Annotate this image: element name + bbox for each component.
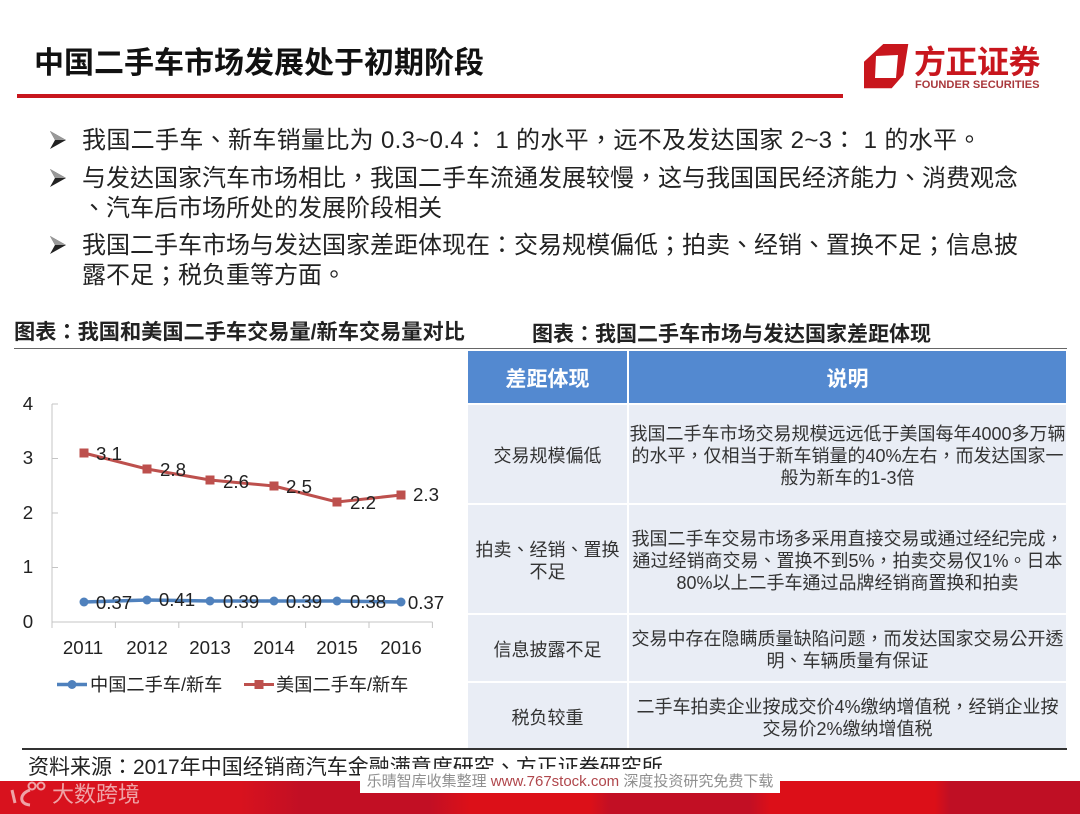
legend: 中国二手车/新车 xyxy=(90,675,222,695)
line chart xyxy=(23,393,444,695)
bullet 2 xyxy=(50,165,1018,222)
series: US xyxy=(80,443,439,513)
bullet 2: 、汽车后市场所处的发展阶段相关 xyxy=(82,195,442,222)
table: 交易价2%缴纳增值税 xyxy=(762,718,932,738)
axes xyxy=(52,404,432,628)
table header: 差距体现 xyxy=(506,368,590,391)
table: 般为新车的1-3倍 xyxy=(780,468,914,488)
table: 说明 xyxy=(826,368,868,391)
bullet 3 xyxy=(50,232,1018,289)
logo: Founder Securities xyxy=(864,44,1040,91)
footer brand watermark xyxy=(10,782,140,807)
x axis labels: 2011 xyxy=(63,637,103,658)
y axis labels: 0 xyxy=(23,611,33,632)
table: 交易中存在隐瞒质量缺陷问题，而发达国家交易公开透 xyxy=(632,629,1064,649)
logo: Founder Securities: 方正证券 xyxy=(914,44,1040,80)
series: China: 0.39 xyxy=(223,591,259,612)
bullet 3: 我国二手车市场与发达国家差距体现在：交易规模偏低；拍卖、经销、置换不足；信息披 xyxy=(82,232,1018,259)
series: China: 0.38 xyxy=(350,591,386,612)
series: China xyxy=(80,589,444,613)
site watermark: 乐晴智库收集整理 www.767stock.com 深度投资研究免费下载 xyxy=(367,773,773,790)
row 1 xyxy=(468,405,627,503)
bullet 1: 我国二手车、新车销量比为 0.3~0.4： 1 的水平，远不及发达国家 2~3： 1 的水平。 xyxy=(82,127,982,154)
table: 我国二手车交易市场多采用直接交易或通过经纪完成， xyxy=(632,529,1064,549)
table: 80%以上二手车通过品牌经销商置换和拍卖 xyxy=(676,573,1019,593)
table: 二手车拍卖企业按成交价4%缴纳增值税，经销企业按 xyxy=(636,697,1058,717)
x axis labels: 2015 xyxy=(316,637,358,658)
y axis labels: 1 xyxy=(23,556,33,577)
table xyxy=(468,351,1066,748)
series: US: 2.3 xyxy=(413,484,439,505)
logo: Founder Securities: FOUNDER SECURITIES xyxy=(915,79,1040,91)
heading rule xyxy=(14,348,1067,349)
bullet list xyxy=(50,127,1018,289)
y axis labels: 4 xyxy=(23,393,33,414)
series: China: 0.41 xyxy=(159,589,195,610)
y axis labels xyxy=(23,393,33,632)
footer band xyxy=(0,781,1080,814)
x axis labels: 2014 xyxy=(253,637,295,658)
row 2: 拍卖、经销、置换 xyxy=(476,540,620,560)
table: 我国二手车市场交易规模远远低于美国每年4000多万辆 xyxy=(629,424,1066,444)
y axis labels: 2 xyxy=(23,502,33,523)
series: China: 0.37 xyxy=(96,592,132,613)
row 2: 不足 xyxy=(530,562,566,582)
y axis labels: 3 xyxy=(23,447,33,468)
row 2 xyxy=(468,505,627,613)
source note: 资料来源：2017年中国经销商汽车金融满意度研究、方正证券研究所 xyxy=(28,756,663,779)
title rule xyxy=(17,94,843,98)
x axis labels: 2016 xyxy=(380,637,422,658)
row 4: 税负较重 xyxy=(512,708,584,728)
table: 通过经销商交易、置换不到5%，拍卖交易仅1%。日本 xyxy=(632,551,1063,571)
table header xyxy=(468,351,627,403)
x axis labels: 2012 xyxy=(126,637,168,658)
row 1: 交易规模偏低 xyxy=(494,446,602,466)
row 3 xyxy=(468,615,627,681)
bullet 3: 露不足；税负重等方面。 xyxy=(82,262,346,289)
x axis labels xyxy=(63,637,422,658)
series: US: 2.2 xyxy=(350,492,376,513)
legend: 美国二手车/新车 xyxy=(276,675,408,695)
site watermark xyxy=(360,769,780,793)
table bottom rule xyxy=(22,748,1067,750)
footer brand watermark: 大数跨境 xyxy=(52,782,140,807)
series: US: 3.1 xyxy=(96,443,122,464)
series: US: 2.5 xyxy=(286,476,312,497)
series: China: 0.37 xyxy=(408,592,444,613)
legend xyxy=(57,675,408,695)
row 3: 信息披露不足 xyxy=(494,640,602,660)
table: 的水平，仅相当于新车销量的40%左右，而发达国家一 xyxy=(631,446,1064,466)
series: US: 2.6 xyxy=(223,471,249,492)
series: US: 2.8 xyxy=(160,459,186,480)
title: 中国二手车市场发展处于初期阶段 xyxy=(34,47,484,80)
left chart heading: 图表：我国和美国二手车交易量/新车交易量对比 xyxy=(14,321,465,344)
x axis labels: 2013 xyxy=(189,637,231,658)
series: China: 0.39 xyxy=(286,591,322,612)
right table heading: 图表：我国二手车市场与发达国家差距体现 xyxy=(532,323,931,346)
row 4 xyxy=(468,683,627,748)
bullet 2: 与发达国家汽车市场相比，我国二手车流通发展较慢，这与我国国民经济能力、消费观念 xyxy=(82,165,1018,192)
table: 明、车辆质量有保证 xyxy=(766,651,928,671)
